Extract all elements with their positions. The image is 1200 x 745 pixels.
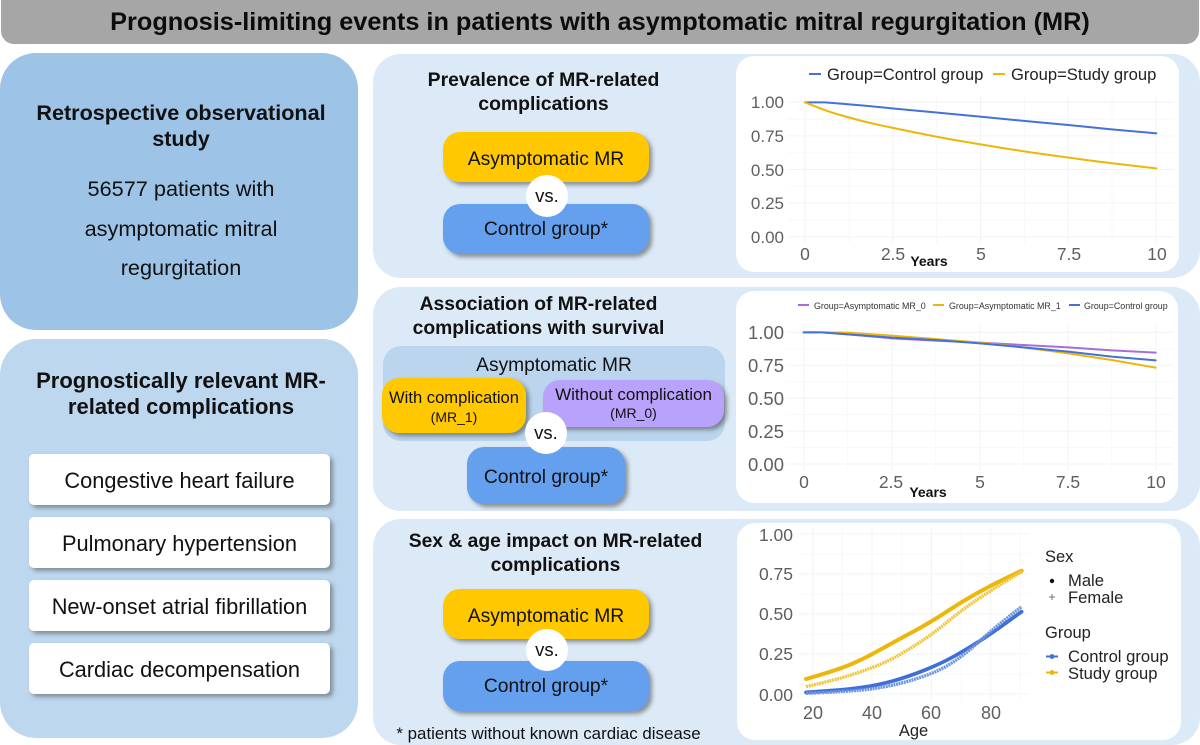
line chart: prevalence: 10 [1147, 244, 1167, 264]
complications heading: Prognostically relevant MR- [36, 368, 326, 393]
vs badge [526, 175, 568, 217]
complication: congestive heart failure: Congestive heart failure [64, 468, 295, 493]
scatter line chart: sex and age: 80 [981, 703, 1001, 723]
scatter line chart: sex and age: Sex [1045, 548, 1074, 566]
title bar [1, 0, 1199, 44]
box: control group: Control group* [484, 676, 608, 697]
line chart: prevalence: Group=Study group [1011, 65, 1156, 84]
title bar: Prognosis-limiting events in patients with asymptomatic mitral regurgitation (MR) [110, 8, 1090, 36]
box: with complication: (MR_1) [431, 409, 477, 425]
prevalence heading [428, 69, 659, 115]
study heading: Retrospective observational [36, 100, 326, 125]
vs badge: vs. [534, 422, 558, 443]
line chart: prevalence: 7.5 [1057, 244, 1081, 264]
line chart: survival: Years [909, 484, 947, 500]
scatter line chart: sex and age: 20 [803, 703, 823, 723]
box: control group [467, 447, 625, 504]
panel: prevalence [373, 54, 1200, 278]
study population text [85, 176, 277, 280]
footnote: * patients without known cardiac disease [396, 724, 701, 743]
line chart: survival: 0.50 [748, 388, 784, 409]
line chart: prevalence: 0.50 [751, 161, 784, 180]
box: asymptomatic MR [443, 589, 649, 639]
line chart: prevalence: 5 [976, 244, 986, 264]
box: without complication: Without complication [555, 385, 712, 404]
survival heading: Association of MR-related [420, 294, 657, 315]
chart card: sex and age [737, 523, 1181, 740]
scatter line chart: sex and age: 0.00 [759, 685, 793, 705]
panel: sex and age [373, 519, 1200, 745]
line chart: survival: Group=Asymptomatic MR_1 [949, 301, 1061, 311]
box: asymptomatic MR: Asymptomatic MR [468, 606, 624, 626]
box: control group: Control group* [484, 219, 608, 240]
line chart: prevalence: 0.75 [751, 127, 784, 146]
line chart: prevalence: 1.00 [751, 93, 784, 112]
line chart: survival: 2.5 [879, 472, 903, 492]
scatter line chart: sex and age: 60 [921, 703, 941, 723]
line chart: survival: 5 [975, 472, 985, 492]
study population text: 56577 patients with [88, 176, 274, 201]
line chart: survival: 0.25 [748, 421, 784, 442]
scatter line chart: sex and age: Age [899, 722, 928, 740]
chart card: prevalence [736, 56, 1179, 272]
box: control group: Control group* [484, 466, 608, 488]
line chart: survival: 10 [1146, 472, 1166, 492]
line chart: prevalence: 0.25 [751, 194, 784, 213]
sex and age heading [409, 531, 702, 576]
scatter line chart: sex and age: 40 [862, 703, 882, 723]
line chart: prevalence: 2.5 [881, 244, 905, 264]
box: control group [443, 661, 649, 711]
panel: complications list [0, 339, 358, 738]
chart card: survival [736, 291, 1178, 503]
complications heading: related complications [68, 394, 294, 419]
line chart: survival: 7.5 [1056, 472, 1080, 492]
study heading [36, 100, 326, 151]
sex and age heading: Sex & age impact on MR-related [409, 531, 702, 552]
complication: cardiac decompensation: Cardiac decompensation [59, 657, 300, 682]
line chart: survival: 0 [799, 472, 809, 492]
prevalence heading: Prevalence of MR-related [428, 69, 659, 91]
survival heading [413, 294, 664, 339]
vs badge [525, 412, 567, 454]
scatter line chart: sex and age: 1.00 [759, 525, 793, 545]
line chart: survival: 1.00 [748, 322, 784, 343]
box: with complication: With complication [389, 388, 519, 407]
box: control group [443, 204, 649, 254]
survival heading: complications with survival [413, 318, 664, 339]
study population text: regurgitation [121, 255, 241, 280]
complication: cardiac decompensation [29, 643, 330, 694]
group: asymptomatic MR [383, 346, 725, 441]
line chart: prevalence: Group=Control group [827, 65, 983, 84]
study population text: asymptomatic mitral [85, 216, 277, 240]
scatter line chart: sex and age: 0.75 [759, 564, 793, 584]
complication: atrial fibrillation [29, 580, 330, 631]
complication: pulmonary hypertension: Pulmonary hypertension [62, 531, 297, 556]
scatter line chart: sex and age: 0.25 [759, 644, 793, 664]
scatter line chart: sex and age: Group [1045, 624, 1091, 642]
line chart: prevalence: 0 [800, 244, 810, 264]
box: without complication [543, 380, 724, 427]
scatter line chart: sex and age: Control group [1068, 647, 1169, 666]
sex and age heading: complications [491, 555, 620, 576]
line chart: survival: Group=Asymptomatic MR_0 [814, 301, 926, 311]
line chart: prevalence: 0.00 [751, 228, 784, 247]
vs badge [526, 629, 568, 671]
panel: study design [0, 53, 358, 330]
prevalence heading: complications [478, 93, 609, 115]
complication: atrial fibrillation: New-onset atrial fibrillation [52, 594, 307, 619]
vs badge: vs. [535, 185, 559, 206]
box: without complication: (MR_0) [610, 405, 657, 421]
scatter line chart: sex and age: 0.50 [759, 604, 793, 624]
line chart: survival: Group=Control group [1084, 301, 1168, 311]
panel: survival [373, 287, 1200, 511]
box: with complication [382, 378, 526, 433]
complication: congestive heart failure [29, 454, 330, 505]
complications heading [36, 368, 326, 419]
box: asymptomatic MR [443, 132, 649, 182]
scatter line chart: sex and age: Female [1068, 588, 1123, 607]
box: asymptomatic MR: Asymptomatic MR [468, 148, 624, 170]
line chart: prevalence: Years [910, 253, 948, 269]
vs badge: vs. [535, 639, 559, 660]
complication: pulmonary hypertension [29, 517, 330, 568]
study heading: study [152, 126, 210, 151]
line chart: survival: 0.75 [748, 355, 784, 376]
scatter line chart: sex and age: Male [1068, 571, 1104, 590]
line chart: survival: 0.00 [748, 454, 784, 475]
group label: Asymptomatic MR [476, 355, 632, 376]
scatter line chart: sex and age: Study group [1068, 664, 1157, 683]
